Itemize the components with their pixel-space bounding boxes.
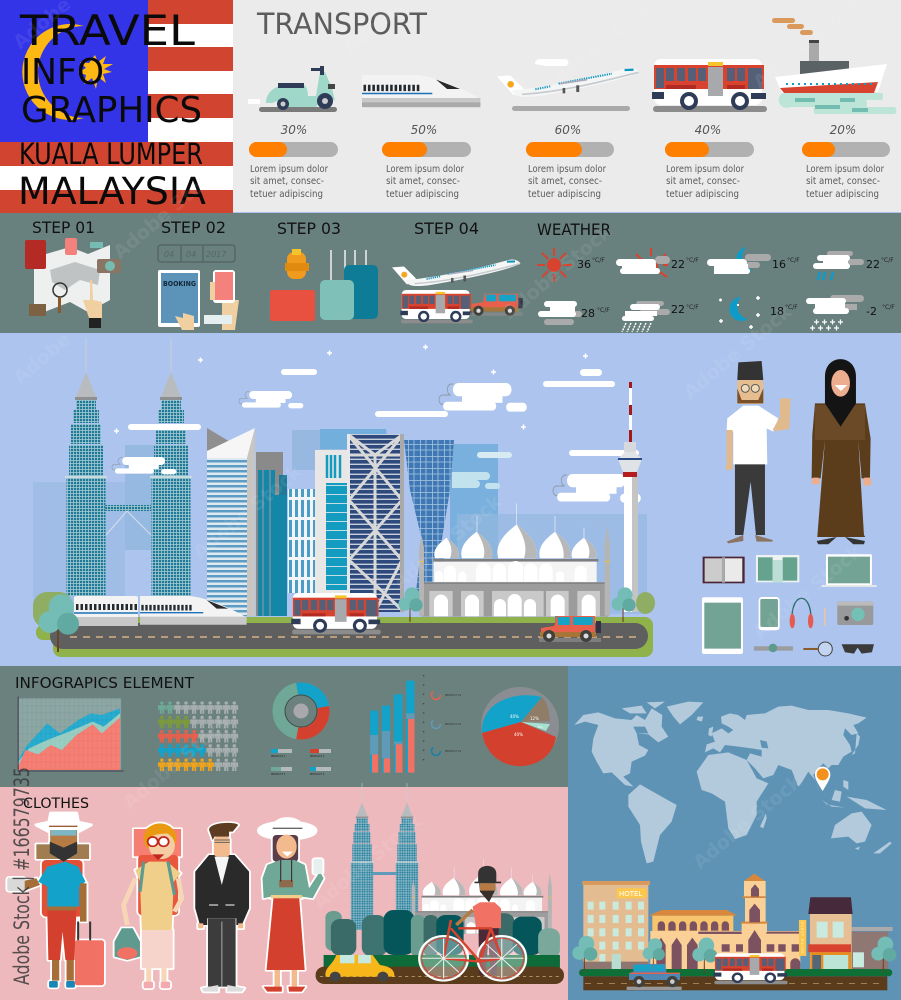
description text blocks: Lorem ipsum dolor: [386, 164, 464, 175]
step 02 illustration: booking: [158, 245, 239, 330]
icon: tablet: [702, 597, 743, 654]
description text blocks: Lorem ipsum dolor: [528, 164, 606, 175]
icon: laptop: [822, 554, 877, 587]
step 01 heading: STEP 01: [32, 218, 95, 237]
icon: pen: [824, 608, 826, 626]
pie chart: 6%: [538, 725, 543, 729]
step 02 illustration: booking: 04: [186, 250, 196, 259]
description text blocks: sit amet, consec-: [806, 176, 880, 187]
weather heading: WEATHER: [537, 220, 611, 239]
weather: sunny 36: [537, 248, 605, 282]
panel: world map and town: [568, 666, 901, 1000]
weather: rain 22: °C/F: [881, 257, 894, 264]
description text blocks: tetuer adipiscing: [528, 189, 601, 200]
donut legend: PRODUCT 1: [271, 754, 286, 758]
blue jeep: [627, 964, 682, 990]
woman with hat: [259, 819, 324, 992]
watermarks: Adobe Stock: [499, 220, 616, 324]
icon: book: [703, 557, 745, 583]
label: 40 percent: 40%: [695, 123, 721, 137]
title: malaysia: MALAYSIA: [18, 170, 206, 213]
kl tower: [618, 382, 642, 612]
weather: cloudy night 16: 16: [772, 258, 786, 271]
red bus: [714, 953, 788, 984]
weather: clear night 18: 18: [770, 305, 784, 318]
trees: [39, 587, 636, 652]
panel: malaysian flag title block: [0, 0, 233, 213]
description text blocks: Lorem ipsum dolor: [666, 164, 744, 175]
colonial building: [648, 874, 806, 972]
description text blocks: tetuer adipiscing: [386, 189, 459, 200]
hotel: [582, 881, 650, 972]
icon: map: [756, 555, 799, 583]
man in suit: [195, 823, 249, 992]
map pin on malaysia: [815, 767, 830, 791]
icon: ship: [772, 18, 896, 114]
title: graphics: GRAPHICS: [21, 90, 202, 131]
weather: partly cloudy 22: °C/F: [686, 257, 699, 264]
weather: partly cloudy 22: [616, 248, 699, 277]
man with bicycle: [419, 866, 526, 981]
weather: snow -2: [806, 295, 895, 330]
jeep on road: [539, 616, 601, 642]
heading: transport: TRANSPORT: [256, 7, 427, 41]
road and grass: [33, 592, 655, 657]
world map: [574, 702, 892, 863]
weather: cloudy 28: °C/F: [597, 307, 610, 314]
weather: rain 22: 22: [866, 258, 880, 271]
pie chart: 40%: [514, 732, 523, 737]
mini city scene: [316, 783, 564, 984]
office tower with sloped roof: [207, 428, 255, 616]
label: 30 percent: 30%: [281, 123, 307, 137]
icon: scooter: [248, 66, 337, 112]
bus on road: [291, 593, 381, 634]
background buildings: [33, 429, 647, 617]
description text blocks: sit amet, consec-: [386, 176, 460, 187]
step 03 heading: STEP 03: [277, 219, 341, 238]
weather: drizzle 22: 22: [671, 303, 685, 316]
title: kuala lumper: KUALA LUMPER: [19, 137, 203, 171]
step 02 heading: STEP 02: [161, 218, 226, 237]
title: travel: TRAVEL: [19, 6, 196, 55]
watermarks: Adobe Stock: [749, 540, 866, 644]
panel: clothes: [0, 783, 568, 1000]
watermarks: Adobe: [339, 0, 405, 59]
icon: crescent: [22, 24, 84, 120]
trees: [572, 936, 896, 973]
description text blocks: [250, 164, 884, 200]
label: 60 percent: 60%: [555, 123, 581, 137]
watermarks: Adobe Stock: [109, 160, 226, 264]
white and teal building: [315, 450, 351, 600]
step 04 heading: STEP 04: [414, 219, 479, 238]
weather: snow -2: °C/F: [882, 304, 895, 311]
weather: cloudy night 16: [707, 247, 800, 274]
weather: sunny 36: °C/F: [592, 257, 605, 264]
heading: clothes: CLOTHES: [23, 796, 89, 812]
description text blocks: Lorem ipsum dolor: [250, 164, 328, 175]
watermarks: Adobe Stock: [189, 460, 306, 564]
step 02 illustration: booking: BOOKING: [163, 280, 196, 288]
bullet train: [74, 596, 247, 626]
weather: cloudy 28: [538, 301, 610, 325]
weather: rain 22: [813, 251, 894, 280]
step 04 illustration: plane, bus and jeep: [392, 259, 523, 323]
weather: clear night 18: °C/F: [785, 304, 798, 311]
colonial building: GUEST HOUSE: [800, 922, 804, 953]
travel items: [702, 554, 877, 656]
label: 20 percent: 20%: [830, 123, 856, 137]
watermarks: Adobe Stock: [689, 770, 806, 874]
bar chart legend: PRODUCT 01: [445, 722, 462, 726]
icon: watch: [754, 644, 793, 652]
shop: [808, 897, 893, 974]
weather: cloudy 28: 28: [581, 307, 595, 320]
icon: plane: [497, 59, 640, 111]
watermarks: Adobe Stock: [389, 490, 506, 594]
description text blocks: tetuer adipiscing: [806, 189, 879, 200]
title: info: INFO: [21, 52, 104, 93]
weather: partly cloudy 22: 22: [671, 258, 685, 271]
donut chart: [275, 685, 327, 737]
step 02 illustration: booking: 2017: [206, 250, 227, 259]
watermarks: Adobe Stock: [309, 810, 426, 914]
watermarks: Adobe Stock: [119, 710, 236, 814]
pie chart: [481, 687, 559, 766]
watermarks: Adobe: [9, 328, 75, 389]
bar chart legend: PRODUCT 01: [445, 749, 462, 753]
step 03 illustration: luggage: [270, 249, 378, 321]
bar chart legend: [432, 690, 462, 756]
heading: infographics element: INFOGRAPICS ELEMENT: [15, 674, 195, 692]
watermark: adobe stock vertical id: Adobe Stock | #166579735: [10, 767, 35, 985]
icon: train: [362, 75, 480, 107]
weather: cloudy night 16: °C/F: [787, 257, 800, 264]
donut legend: PRODUCT 1: [271, 772, 286, 776]
stacked bar chart: [370, 675, 424, 773]
panel: infographics element: [0, 666, 568, 787]
weather: drizzle 22: °C/F: [686, 304, 699, 311]
panel: steps and weather: [0, 213, 901, 333]
description text blocks: tetuer adipiscing: [666, 189, 739, 200]
donut legend: PRODUCT 1: [310, 754, 325, 758]
watermarks: Adobe Stock: [679, 300, 796, 404]
label: 50 percent: 50%: [411, 123, 437, 137]
weather: clear night 18: [719, 296, 798, 329]
icon: sunglasses: [842, 644, 874, 654]
step 02 illustration: booking: 04: [164, 250, 174, 259]
panel: kuala lumpur skyline: [0, 333, 901, 666]
icon: headphones: [790, 598, 813, 628]
street: [579, 969, 892, 990]
traveller with backpack: [115, 823, 182, 988]
donut legend: [271, 749, 331, 776]
blue glass tower: [404, 440, 454, 600]
local woman: [812, 359, 871, 544]
clouds: [112, 344, 641, 503]
weather: sunny 36: 36: [577, 258, 591, 271]
pie chart: 40%: [510, 714, 519, 719]
bar chart legend: PRODUCT 01: [445, 693, 462, 697]
icon: magnifier: [803, 642, 832, 656]
pie chart: 12%: [530, 716, 539, 721]
description text blocks: sit amet, consec-: [666, 176, 740, 187]
icon: star: [78, 55, 113, 89]
description text blocks: sit amet, consec-: [250, 176, 324, 187]
mosque: [419, 503, 610, 617]
area chart: [18, 697, 124, 771]
white striped building: [288, 489, 316, 593]
local man: [726, 361, 791, 543]
weather: drizzle 22: [622, 301, 699, 332]
navy glass tower with diagonal frame: [347, 434, 404, 612]
panel: transport: [233, 0, 901, 212]
petronas twin towers: [65, 338, 192, 596]
donut legend: PRODUCT 1: [310, 772, 325, 776]
traveller with luggage: [7, 813, 104, 988]
progress bars: [249, 142, 890, 157]
description text blocks: tetuer adipiscing: [250, 189, 323, 200]
icon: bus: [652, 59, 767, 112]
step 01 illustration: map and planning items: [25, 238, 121, 328]
grey and teal tower: [256, 452, 287, 616]
weather: snow -2: -2: [866, 305, 877, 318]
icon: camera: [837, 602, 873, 625]
description text blocks: sit amet, consec-: [528, 176, 602, 187]
hotel: HOTEL: [619, 890, 642, 898]
pictogram chart: [158, 701, 238, 771]
town scene: [572, 874, 896, 990]
description text blocks: Lorem ipsum dolor: [806, 164, 884, 175]
icon: phone: [759, 597, 780, 630]
